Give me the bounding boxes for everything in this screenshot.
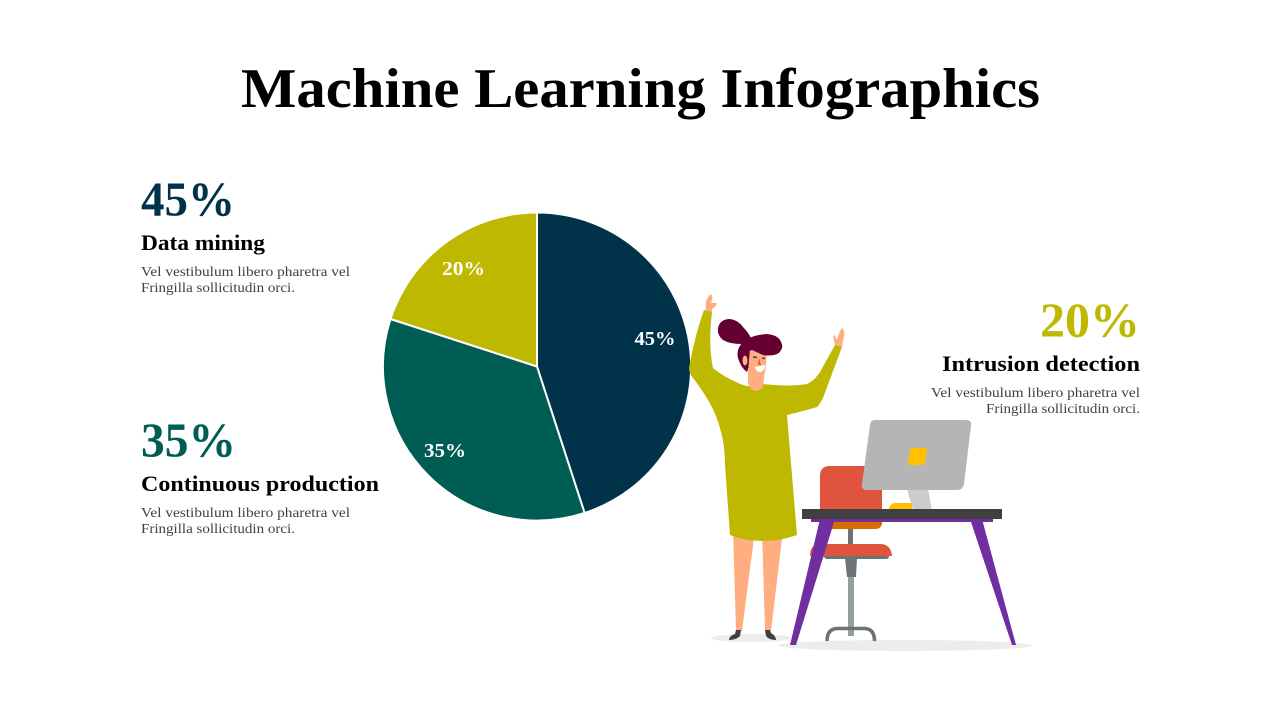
heading: continuous production: Continuous production [141,471,379,496]
chair back [820,466,882,528]
heading: data mining: Data mining [141,230,265,255]
left shoe [729,630,741,640]
label: 45%: 45% [634,328,676,350]
right hand [833,328,844,347]
title: Machine Learning Infographics [241,58,1040,120]
label: 20%: 20% [442,258,485,280]
description: intrusion detection: Fringilla sollicitudin orci. [986,402,1140,417]
smile [755,365,765,372]
left leg [733,530,755,631]
chair base [827,628,874,641]
ear [742,356,748,366]
description: intrusion detection: Vel vestibulum libero pharetra vel [931,386,1140,401]
seat underside [823,556,889,559]
text block: 20% intrusion detection [931,292,1140,417]
hair back [738,343,755,372]
floor shadow [711,634,791,642]
monitor logo [908,448,927,465]
stat: 20%: 20% [1040,292,1140,348]
illustration: desk and chair [778,420,1032,651]
slice: 45% [537,212,691,513]
description: continuous production [141,506,350,537]
right desk leg [970,519,1016,645]
monitor stand [907,489,932,510]
description: data mining: Fringilla sollicitudin orci. [141,281,295,296]
right leg [762,530,783,631]
description: data mining: Vel vestibulum libero pharetra vel [141,265,350,280]
pie chart [383,212,691,521]
chair seat [810,544,892,556]
right shoe [765,630,776,640]
hair top [742,334,782,356]
desk shadow [778,640,1032,651]
desk stretcher [811,519,993,522]
description: continuous production: Vel vestibulum libero pharetra vel [141,506,350,521]
text block: 45% data mining [141,172,350,296]
left desk leg [790,519,835,645]
dress [689,310,842,541]
description: data mining [141,265,350,296]
keyboard [889,503,912,509]
chair stem [848,529,853,545]
left hand [706,294,717,312]
slice: 20% [390,212,537,366]
description: intrusion detection [931,386,1140,417]
chair back underside [821,519,882,529]
text block: 35% continuous production [141,412,379,537]
heading: intrusion detection: Intrusion detection [942,351,1140,376]
desk top [802,509,1002,519]
label: 35%: 35% [424,440,466,462]
illustration: woman [689,294,844,642]
face [748,348,767,377]
monitor [862,420,971,490]
hair bun [718,319,751,344]
slice: 35% [383,319,585,521]
chair column [845,558,857,577]
neck [748,368,765,391]
stat: 45%: 45% [141,172,235,226]
stat: 35%: 35% [141,412,236,468]
eyes and nose [753,357,765,358]
description: continuous production: Fringilla sollicitudin orci. [141,522,295,537]
